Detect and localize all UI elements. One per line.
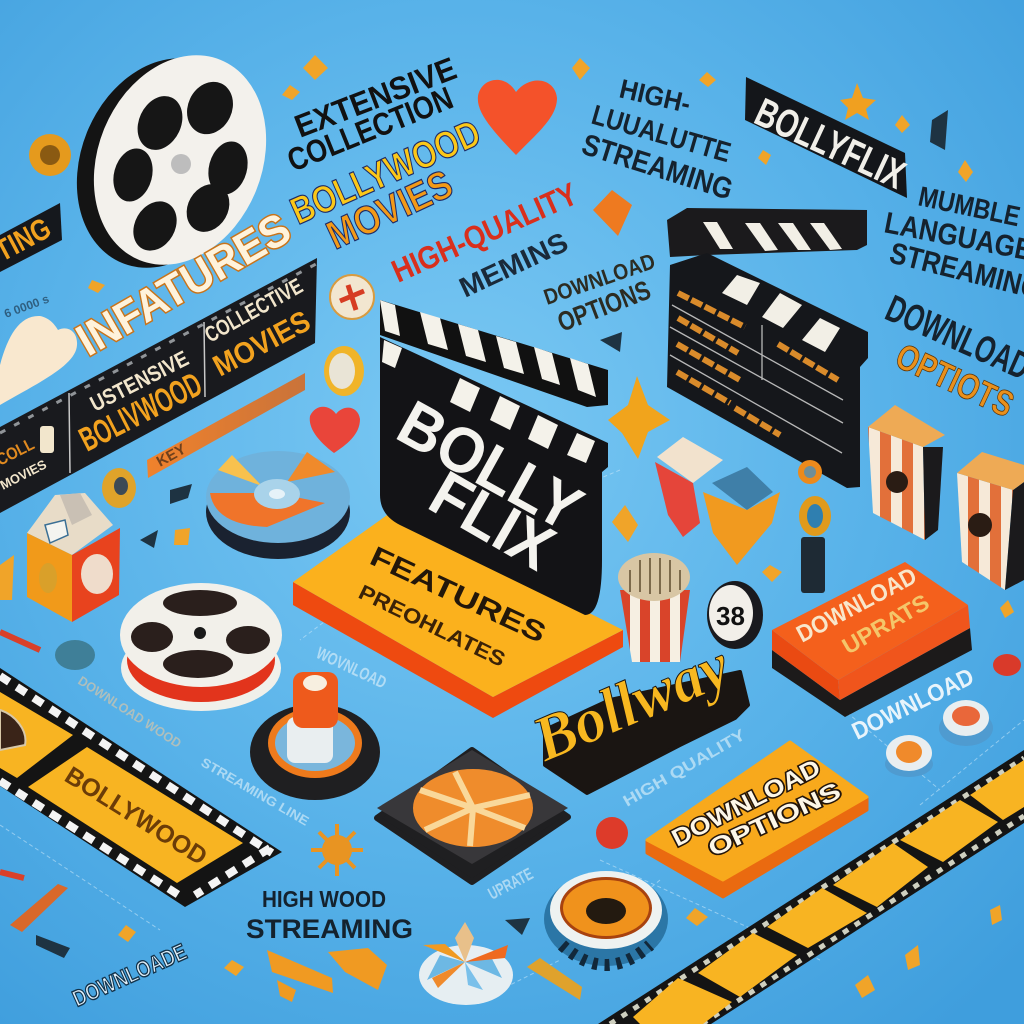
heading: high wood streaming bbox=[246, 886, 413, 944]
orange button: download: UPRATS bbox=[838, 589, 934, 659]
icon: orange gem bbox=[593, 190, 632, 236]
popcorn cup, centre bbox=[618, 553, 690, 662]
button: download options: DOWNLOAD bbox=[667, 754, 825, 852]
heading: high-quality streaming: HIGH- bbox=[617, 74, 694, 119]
icon: gold star, centre bbox=[608, 376, 670, 459]
banner: bollywood collective movies: COLLECTIVE bbox=[200, 273, 307, 347]
icon: heart, large bbox=[478, 80, 557, 155]
diamond tile with wheel bbox=[377, 750, 568, 882]
heading: multiple language streaming bbox=[882, 181, 1024, 306]
orange button: download bbox=[772, 562, 972, 717]
faded labels: HIGH QUALITY bbox=[620, 727, 749, 810]
icon: folded shapes bbox=[655, 437, 780, 565]
heading: bollywood movies: BOLLYWOOD bbox=[285, 112, 487, 233]
origami star disc bbox=[419, 922, 513, 1005]
icon: number dial bbox=[707, 581, 763, 649]
heading: high-quality streaming: STREAMING bbox=[578, 128, 737, 207]
banner: bollywood collective movies: MOVIES bbox=[208, 305, 316, 383]
faded labels: STREAMING LINE bbox=[198, 755, 312, 829]
icon: plus badge bbox=[330, 275, 374, 319]
red marks, left bbox=[0, 632, 40, 878]
icon: sun badge bbox=[311, 824, 363, 876]
icon: gold key post bbox=[799, 496, 831, 593]
popcorn box, far right bbox=[957, 452, 1024, 590]
orange base with features text: PREOHLATES bbox=[355, 581, 509, 672]
heading: high-quality streaming bbox=[578, 74, 737, 207]
orange fan shapes bbox=[267, 948, 387, 1002]
label: downloade, bottom left: DOWNLOADE bbox=[68, 938, 190, 1012]
label: memins: MEMINS bbox=[454, 226, 573, 303]
icon: gold star bbox=[840, 83, 876, 120]
faded labels bbox=[75, 643, 749, 904]
faded labels: WOVNLOAD bbox=[313, 643, 389, 692]
label: download, lower right: DOWNLOAD bbox=[848, 663, 978, 745]
sign: bollyflix: BOLLYFLIX bbox=[748, 90, 912, 198]
button: download options bbox=[647, 742, 867, 897]
cloud bbox=[0, 316, 77, 405]
lamp on dark disc bbox=[250, 672, 380, 800]
faded labels: DOWNLOAD WOOD bbox=[75, 673, 184, 751]
heading: high-quality, red: HIGH-QUALITY bbox=[386, 176, 583, 289]
small film reel, centre left bbox=[120, 583, 282, 711]
icon: red button bbox=[596, 817, 628, 849]
icon: gold bar bbox=[527, 958, 582, 1000]
bollway 3d script: Bollway bbox=[522, 629, 740, 775]
icon: small heart bbox=[310, 407, 360, 453]
label: download options bbox=[540, 248, 658, 338]
film reel, top left bbox=[47, 29, 296, 294]
faint label under ting: 6 0000 s bbox=[2, 292, 51, 321]
orange base with features text bbox=[293, 513, 623, 718]
heading: extensive collection: EXTENSIVE bbox=[290, 50, 461, 145]
banner: bollywood collective movies bbox=[0, 258, 317, 513]
label: download options: DOWNLOAD bbox=[540, 248, 658, 310]
wheel disc, centre left bbox=[206, 451, 350, 559]
film strip, bottom right bbox=[598, 750, 1024, 1024]
orange button: download: DOWNLOAD bbox=[792, 562, 921, 648]
heading: extensive collection: COLLECTION bbox=[282, 80, 458, 178]
heading: infatures: INFATURES bbox=[68, 202, 299, 366]
heading: high wood streaming: STREAMING bbox=[246, 914, 413, 944]
icon: gold ring bbox=[29, 134, 71, 176]
clapperboard, right bbox=[667, 208, 868, 488]
gift box bbox=[27, 493, 120, 622]
orange banner strip: KEY bbox=[154, 441, 189, 470]
icon: gold ring, small bbox=[102, 468, 136, 508]
icon: gold coin bbox=[324, 346, 364, 396]
sign: bollyflix bbox=[745, 77, 912, 198]
orange banner strip bbox=[147, 373, 305, 478]
icon: number dial: 38 bbox=[716, 601, 745, 631]
faded labels: UPRATE bbox=[485, 864, 536, 904]
small dark marks bbox=[36, 110, 948, 958]
central clapperboard: FLIX bbox=[418, 457, 567, 584]
rocket shape, lower left bbox=[10, 884, 68, 932]
film strip, bottom left bbox=[0, 668, 282, 907]
banner: bollywood collective movies: USTENSIVE bbox=[86, 346, 193, 416]
heading: bollywood movies: MOVIES bbox=[320, 162, 459, 258]
button: download options: OPTIONS bbox=[704, 778, 845, 862]
heading: bollywood movies bbox=[285, 112, 487, 258]
central clapperboard: BOLLY bbox=[386, 386, 594, 545]
icon: small discs, lower right bbox=[885, 654, 1021, 777]
film strip, bottom left: BOLLYWOOD bbox=[60, 761, 212, 871]
banner: bollywood collective movies: BOLIVWOOD bbox=[73, 365, 208, 459]
icon: orange ring, right bbox=[798, 460, 822, 484]
heading: high wood streaming: HIGH WOOD bbox=[262, 886, 386, 912]
orange base with features text: FEATURES bbox=[365, 540, 551, 649]
central clapperboard bbox=[380, 300, 608, 615]
gear disc bbox=[544, 871, 668, 966]
teal pick bbox=[55, 640, 95, 670]
popcorn box, right bbox=[868, 405, 945, 540]
heading: high-quality streaming: LUUALUTTE bbox=[588, 99, 734, 168]
label: download options: OPTIONS bbox=[553, 275, 655, 338]
